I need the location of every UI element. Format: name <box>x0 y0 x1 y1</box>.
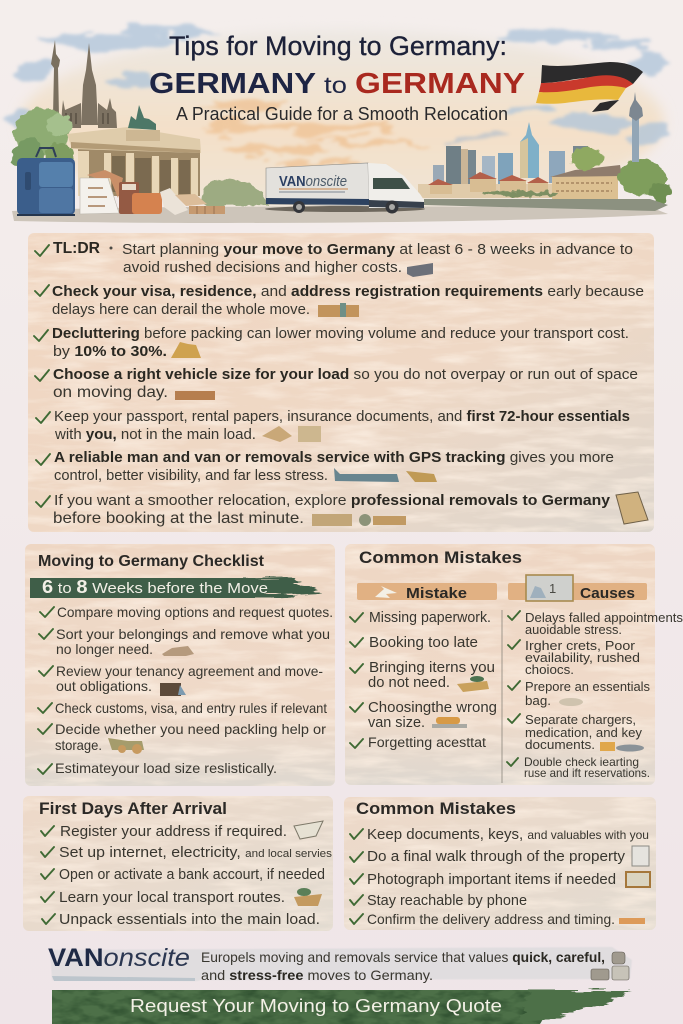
tip: GPS: control, better visibility, and far less stress. <box>54 467 328 484</box>
mistakes column <box>368 609 497 750</box>
title: GERMANY <box>355 68 525 100</box>
list heading: Common Mistakes <box>356 799 516 818</box>
tip: visa: delays here can derail the whole move. <box>52 301 310 318</box>
checklist items: Check customs, visa, and entry rules if relevant <box>55 700 327 716</box>
checklist items: Decide whether you need packling help or <box>55 721 326 737</box>
logo: VANonscite <box>48 944 190 972</box>
icon: suitcase <box>175 391 215 400</box>
causes column: Delays falled appointments <box>525 611 683 625</box>
arrival items: Unpack essentials into the main load. <box>59 911 320 928</box>
checklist items: Compare moving options and request quotes. <box>57 604 333 620</box>
panel: checklist <box>25 544 335 786</box>
tip: visa: Check your visa, residence, and address registration requirements early because <box>52 283 644 300</box>
tip: professional removals: If you want a smoother relocation, explore professional removals to Germany <box>54 492 611 509</box>
checklist heading: Moving to Germany Checklist <box>38 553 265 570</box>
arrival items: Register your address if required. <box>60 823 287 840</box>
icon: case <box>160 683 186 696</box>
mistakes column: Bringing iterns you <box>369 659 495 676</box>
tree left <box>12 108 74 171</box>
tip: decluttering <box>52 325 629 360</box>
mistakes column: Missing paperwork. <box>369 609 491 626</box>
tab: Causes: Causes <box>580 585 635 602</box>
footer: brand band <box>48 944 632 983</box>
arrival items: Set up internet, electricity, and local servies <box>59 844 333 861</box>
icon: box <box>407 263 433 277</box>
mistakes heading: Common Mistakes <box>359 548 522 567</box>
causes column: ruse and ift reservations. <box>524 766 650 780</box>
checklist items: Estimateyour load size reslistically. <box>55 760 277 776</box>
brand description: and stress-free moves to Germany. <box>201 967 433 983</box>
icon: crate with plant <box>457 676 489 692</box>
checklist items: Review your tenancy agreement and move- <box>56 663 323 679</box>
tip: professional removals: before booking at the last minute. <box>53 510 304 527</box>
skyline <box>433 122 588 190</box>
tab: Mistake <box>357 583 497 602</box>
list items <box>367 826 649 927</box>
tip: GPS: A reliable man and van or removals service with GPS tracking gives you more <box>54 449 614 466</box>
brush banner: 6 to 8 Weeks before the Move <box>42 577 268 597</box>
checkmarks <box>350 829 363 924</box>
tip: GPS <box>54 449 614 484</box>
tip: professional removals <box>53 492 611 527</box>
arrival items: Learn your local transport routes. <box>59 889 285 906</box>
icon: plant box <box>294 888 322 906</box>
icon: documents and charger <box>600 742 644 752</box>
arrival items <box>59 823 333 928</box>
title <box>149 31 525 124</box>
panel: TL;DR <box>28 233 654 532</box>
causes column <box>524 611 683 780</box>
checklist items: Sort your belongings and remove what you <box>56 626 330 642</box>
icon: packages <box>262 426 321 442</box>
ground <box>12 206 668 223</box>
tip: vehicle <box>53 366 638 401</box>
tip: essentials <box>54 408 630 443</box>
panel: common mistakes list <box>344 797 656 930</box>
distant trees <box>200 179 268 206</box>
checklist items: storage. <box>55 737 102 753</box>
causes column: medication, and key <box>525 726 643 740</box>
TV tower <box>629 92 643 162</box>
TL:DR text <box>53 240 633 276</box>
brand description: Europels moving and removals service that values quick, careful, <box>201 949 605 965</box>
icon: bags <box>171 342 201 358</box>
tab: Mistake: Mistake <box>406 585 467 602</box>
hero illustration <box>11 27 671 223</box>
mistakes column: Forgetting acesttat <box>368 735 486 750</box>
causes column: bag. <box>525 694 551 708</box>
causes column: Separate chargers, <box>525 713 636 727</box>
mistakes column: do not need. <box>368 674 450 691</box>
icon: parcel <box>619 918 645 924</box>
luggage and boxes <box>87 170 225 215</box>
checklist items: out obligations. <box>56 678 152 694</box>
list items: Do a final walk through of the property <box>367 848 626 865</box>
arrival heading: First Days After Arrival <box>39 799 227 818</box>
causes column: Double check iearting <box>524 755 639 769</box>
tip: essentials: Keep your passport, rental papers, insurance documents, and first 72-hour essentials <box>54 408 630 425</box>
cathedral <box>61 43 117 128</box>
title: Tips for Moving to Germany: <box>169 31 507 61</box>
brand description <box>201 949 605 983</box>
tab: Causes: 1 <box>549 581 556 596</box>
quadriga <box>128 105 156 130</box>
tip: vehicle: Choose a right vehicle size for your load so you do not overpay or run out of space <box>53 366 638 383</box>
call to action banner <box>52 990 632 1024</box>
moving van <box>265 163 425 214</box>
checklist items: no longer need. <box>56 641 153 657</box>
TL:DR text: avoid rushed decisions and higher costs. <box>123 259 402 276</box>
list items: Keep documents, keys, and valuables with you <box>367 826 649 843</box>
icon: floor plan <box>632 846 649 866</box>
title: A Practical Guide for a Smooth Relocation <box>176 104 508 124</box>
list items: Stay reachable by phone <box>367 892 527 909</box>
icon: van and cart <box>334 468 437 482</box>
TL:DR text: Start planning your move to Germany at least 6 - 8 weeks in advance to <box>122 241 633 258</box>
causes column: Irgher crets, Poor <box>525 639 635 653</box>
checkmarks <box>38 607 54 774</box>
arrival items: Open or activate a bank accourt, if needed <box>59 867 325 883</box>
icon: folder <box>616 492 648 524</box>
divider <box>501 610 503 783</box>
mistakes column: van size. <box>368 714 425 731</box>
causes column: auoidable stress. <box>525 623 622 637</box>
van logo: VANonscite <box>279 173 347 190</box>
river wall <box>424 199 668 211</box>
mistakes column: Booking too late <box>369 634 478 651</box>
tip: essentials: with you, not in the main load. <box>54 426 256 443</box>
checklist items <box>55 604 333 776</box>
icon: luggage <box>591 952 629 980</box>
causes column: choiocs. <box>525 663 574 677</box>
title: to <box>324 72 347 98</box>
panel: common mistakes table <box>345 544 683 785</box>
icon: map <box>294 821 323 839</box>
causes column: evailability, rushed <box>525 651 640 665</box>
checkmarks <box>350 611 520 766</box>
icon: frame <box>626 872 650 887</box>
checkmarks <box>34 245 50 507</box>
left tower <box>51 40 60 116</box>
panel: first days after arrival <box>23 796 333 931</box>
icon: bag <box>559 698 583 706</box>
watercolor sky <box>11 27 670 214</box>
mistakes column: Choosingthe wrong <box>368 699 497 716</box>
title: GERMANY <box>149 68 316 100</box>
icon: packed van <box>312 514 406 526</box>
tab: Causes <box>508 575 647 602</box>
icon: car <box>162 646 194 656</box>
icon: van size <box>432 717 467 728</box>
list items: Photograph important items if needed <box>367 871 616 888</box>
document board <box>80 178 119 214</box>
icon: cases <box>318 303 359 317</box>
Brandenburg Gate <box>67 127 201 196</box>
German flag <box>536 62 643 112</box>
causes column: documents. <box>525 738 595 752</box>
tip: decluttering: Decluttering before packing can lower moving volume and reduce your transport cost. <box>52 325 629 342</box>
right trees <box>482 147 671 201</box>
blue suitcase <box>17 148 75 216</box>
tip: decluttering: by 10% to 30%. <box>53 343 167 360</box>
call to action banner: Request Your Moving to Germany Quote <box>130 996 502 1016</box>
brush banner <box>30 577 323 598</box>
list items: Confirm the delivery address and timing. <box>367 911 615 927</box>
causes column: Prepore an essentials <box>525 680 650 694</box>
tip: vehicle: on moving day. <box>53 384 168 401</box>
old town buildings <box>418 165 622 200</box>
tip: visa <box>52 283 644 318</box>
TL:DR text: TL:DR <box>53 240 100 257</box>
checkmarks <box>41 826 55 924</box>
icon: cart <box>108 738 144 754</box>
